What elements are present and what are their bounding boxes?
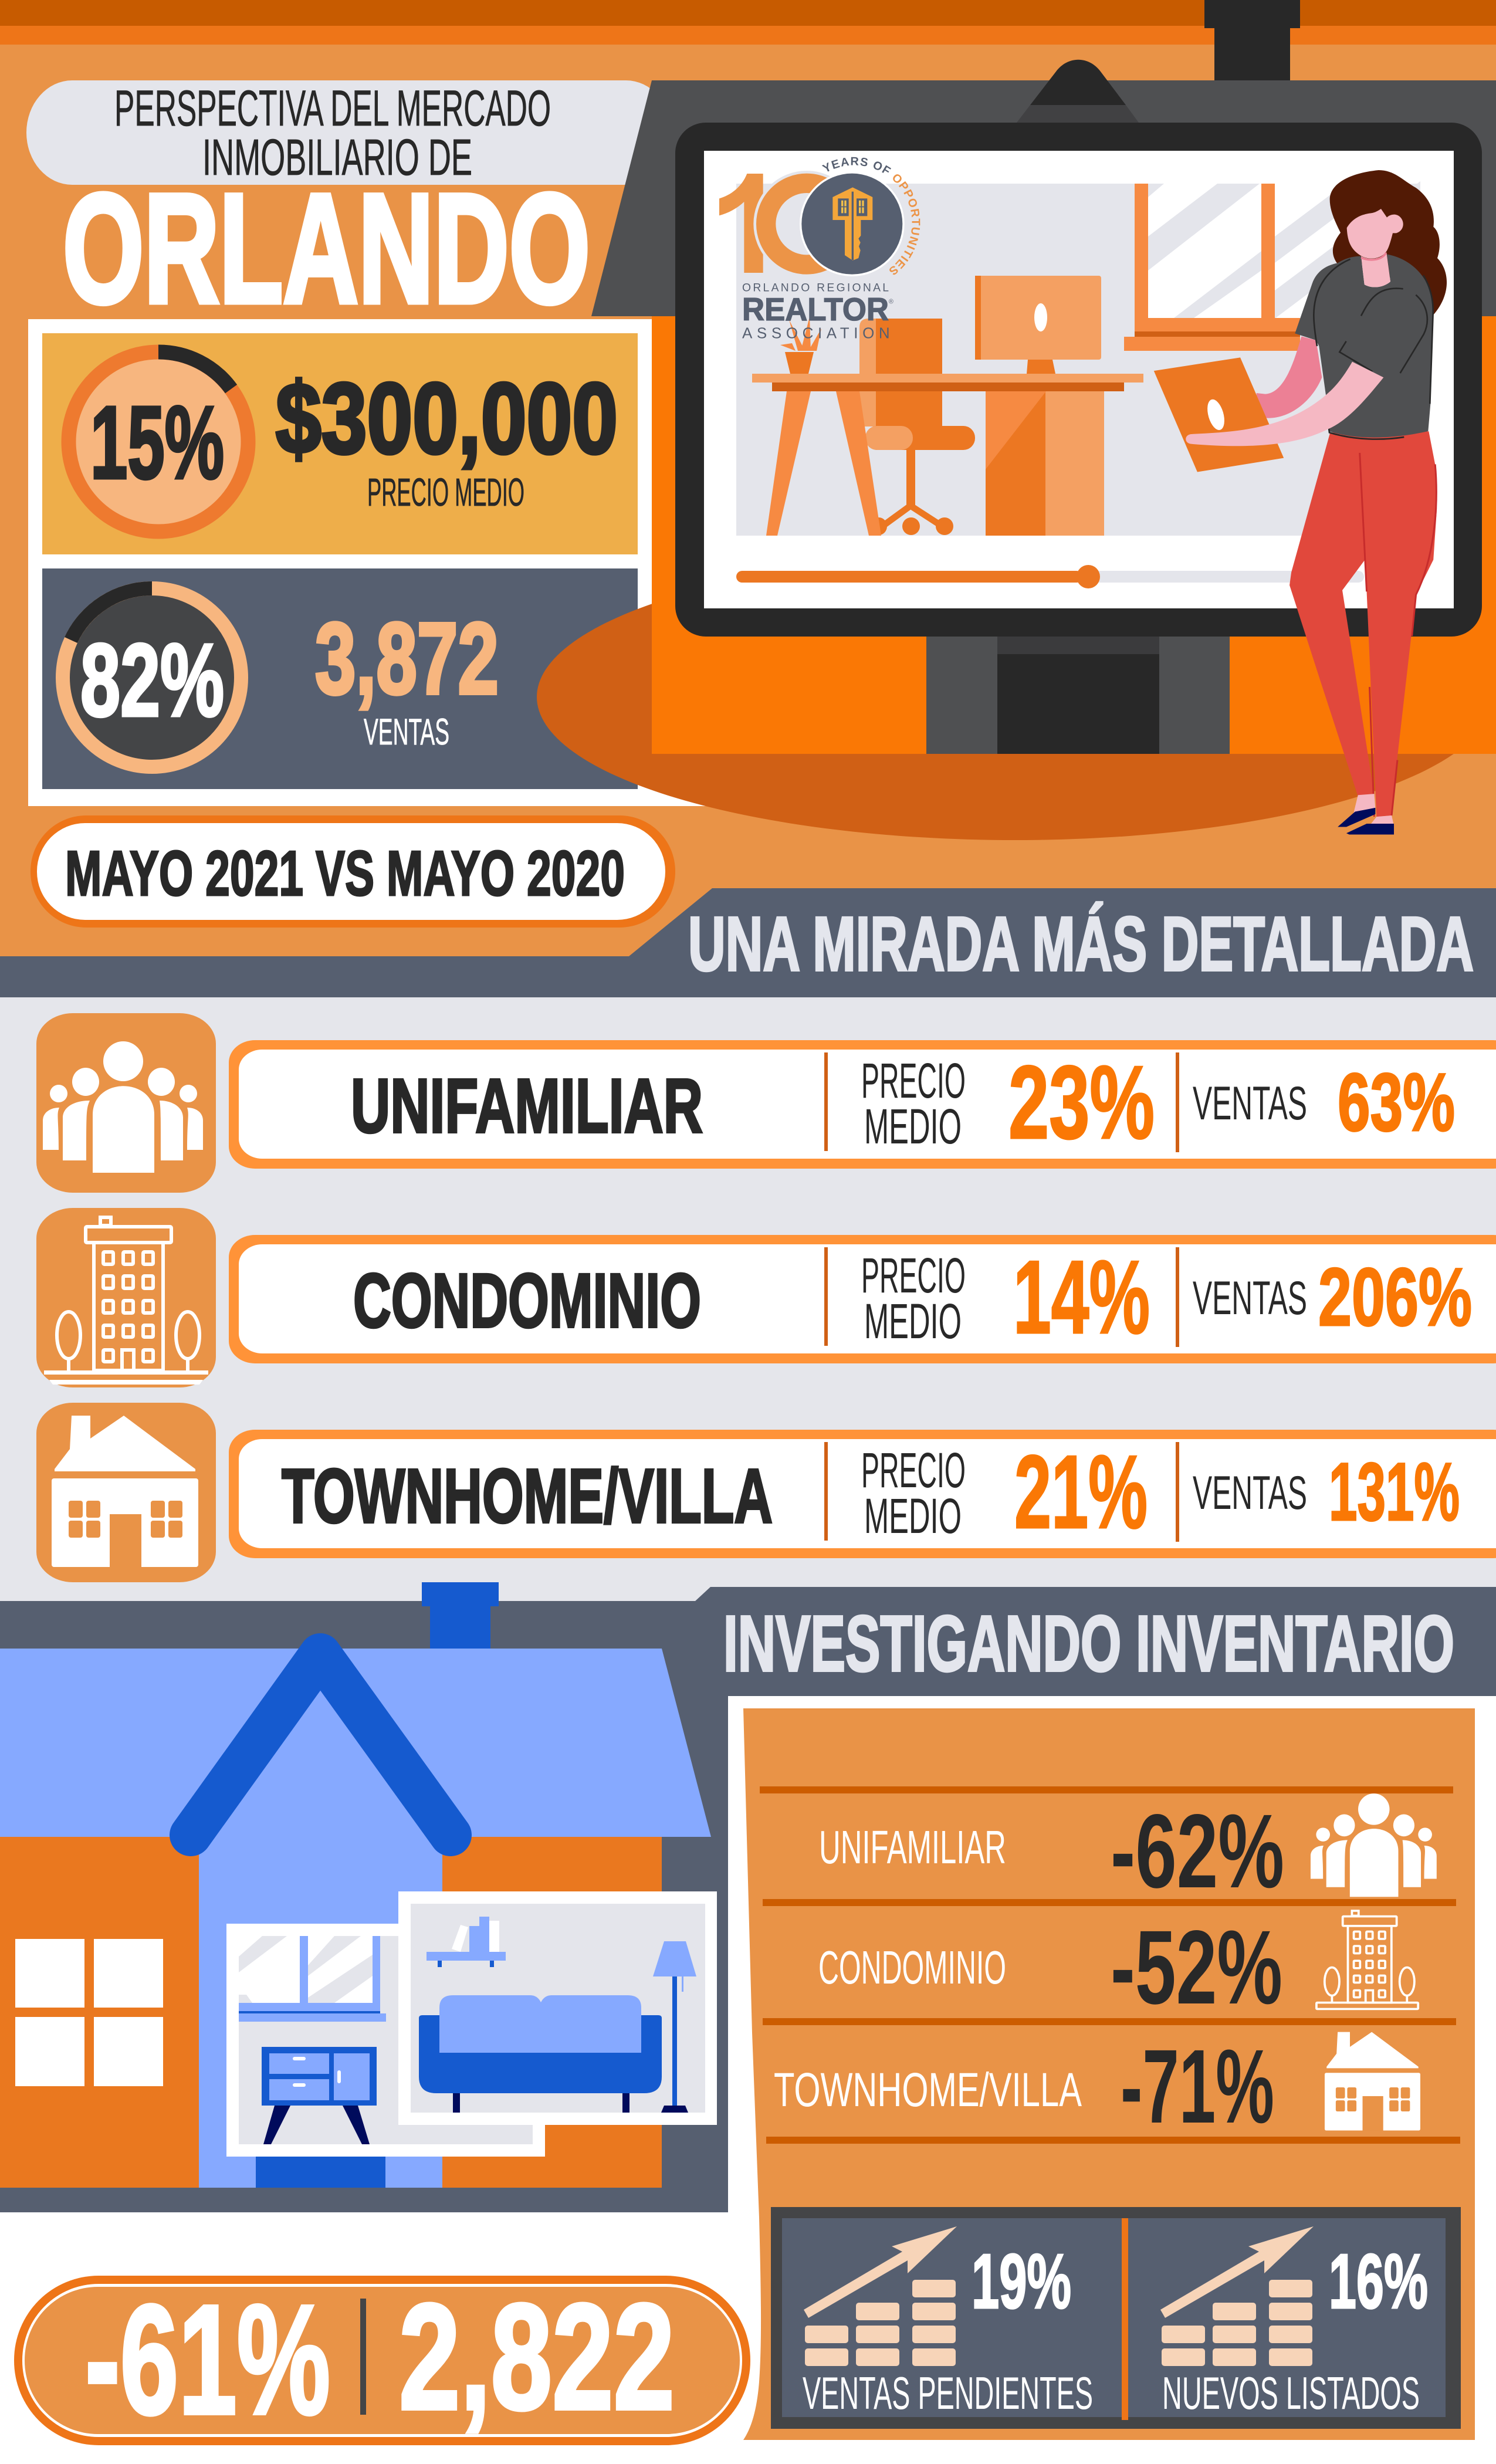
median price label: PRECIO MEDIO [367,471,524,515]
price label [861,1053,966,1154]
inventory: condominium [818,1908,1282,2026]
inventory: single family: UNIFAMILIAR [819,1821,1006,1873]
door [256,2157,385,2188]
title: second line: INMOBILIARIO DE [202,129,472,186]
donut: 15 percent [69,352,248,532]
logo line two: REALTOR [742,292,889,327]
price label: MEDIO [864,1294,962,1349]
median price value: $300,000 [276,363,618,475]
sofa [419,1995,662,2113]
wall mount [1204,0,1300,80]
price label: PRECIO [861,1053,966,1108]
woman hair [1330,170,1447,315]
wall shelf [427,1917,506,1967]
price label: PRECIO [861,1248,966,1303]
inventory: condominium: -52% [1111,1908,1282,2026]
sales label: VENTAS [1193,1467,1307,1519]
chimney [422,1582,499,1649]
new listings value: 16% [1329,2238,1428,2324]
monitor [675,60,1482,754]
icon: condominium [36,1208,216,1387]
row title: UNIFAMILIAR [351,1062,703,1149]
row: townhome [229,1430,1496,1558]
woman presenter [1154,170,1447,834]
stage ellipse [537,554,1493,840]
date comparison pill [31,815,675,928]
floor lamp [653,1941,696,2113]
gable [191,1654,451,1835]
panel: inventory by type [743,1708,1475,2440]
title pill [26,80,672,186]
inventory: townhome [774,2028,1274,2145]
icon: condominium small [1316,1911,1418,2009]
row: single family [229,1040,1496,1169]
logo arc text: YEARS OF OPPORTUNITIES [821,157,920,275]
interior: living room frame [398,1891,717,2125]
price change: 21% [1014,1434,1148,1550]
price label [861,1443,966,1544]
title: market perspective: PERSPECTIVA DEL MERCADO [114,80,551,137]
donut: 15 percent: 15% [90,385,224,500]
inventory: single family: -62% [1111,1792,1284,1910]
panel: key statistics [28,319,767,806]
price label: MEDIO [864,1488,962,1544]
icon: townhome [36,1403,216,1582]
logo line three: ASSOCIATION [742,324,890,342]
section header: closer look [0,888,1496,997]
chair [859,319,975,535]
row title: CONDOMINIO [353,1257,701,1343]
woman neck and face [1347,209,1403,287]
inventory: townhome: TOWNHOME/VILLA [774,2063,1082,2117]
icon: house key [832,187,872,260]
pending sales value: 19% [972,2238,1071,2324]
logo registered mark: ® [889,298,893,305]
potted plant [780,317,821,374]
inventory: townhome: -71% [1121,2028,1274,2145]
chart: new listings growth [1160,2226,1314,2366]
row title: TOWNHOME/VILLA [282,1453,773,1539]
icon: family small [1311,1793,1437,1897]
office window [1124,181,1420,351]
donut: 82 percent: 82% [80,623,224,738]
dark wall band behind monitor [591,80,1496,316]
sideboard [262,2047,377,2144]
house window [15,1939,163,2086]
pending sales label: VENTAS PENDIENTES [803,2367,1093,2419]
icon: family [36,1013,216,1193]
sales value: 3,872 [315,601,499,715]
total inventory value: 2,822 [399,2273,675,2441]
inventory: single family [819,1792,1284,1910]
desktop computer [975,276,1101,374]
price label: PRECIO [861,1443,966,1498]
sales label: VENTAS [1193,1272,1307,1325]
desk [752,374,1143,536]
tablet [1154,357,1284,472]
date comparison pill: MAYO 2021 VS MAYO 2020 [65,838,625,909]
sales label: VENTAS [364,712,449,753]
woman back arm [1257,336,1322,418]
woman trousers [1289,431,1437,834]
row: condominium [229,1235,1496,1363]
total inventory change: -61% [85,2273,330,2447]
logo line one: ORLANDO REGIONAL [742,282,889,295]
sales label: VENTAS [1193,1077,1307,1130]
video progress bar [736,565,1364,588]
price change: 23% [1008,1044,1155,1160]
chart: pending sales growth [804,2226,957,2366]
orange wall [652,316,1496,754]
panel: sales [42,568,638,789]
grey band behind house [0,1601,728,2212]
price label [861,1248,966,1349]
logo: Orlando Regional Realtor Association [719,157,920,342]
panel: pending sales and new listings [771,2207,1461,2429]
interior: bedroom frame [226,1924,545,2157]
inventory: condominium: CONDOMINIO [818,1941,1006,1993]
panel: median price [42,333,638,554]
total inventory pill [14,2273,750,2447]
interior window [239,1936,386,2022]
house illustration [0,1582,717,2188]
woman front arm [1186,362,1383,446]
icon: townhome small [1325,2032,1420,2131]
donut: 82 percent [63,588,241,767]
price label: MEDIO [864,1099,962,1154]
title: Orlando: ORLANDO [63,162,590,336]
price change: 14% [1013,1239,1150,1355]
woman shirt [1295,254,1433,439]
